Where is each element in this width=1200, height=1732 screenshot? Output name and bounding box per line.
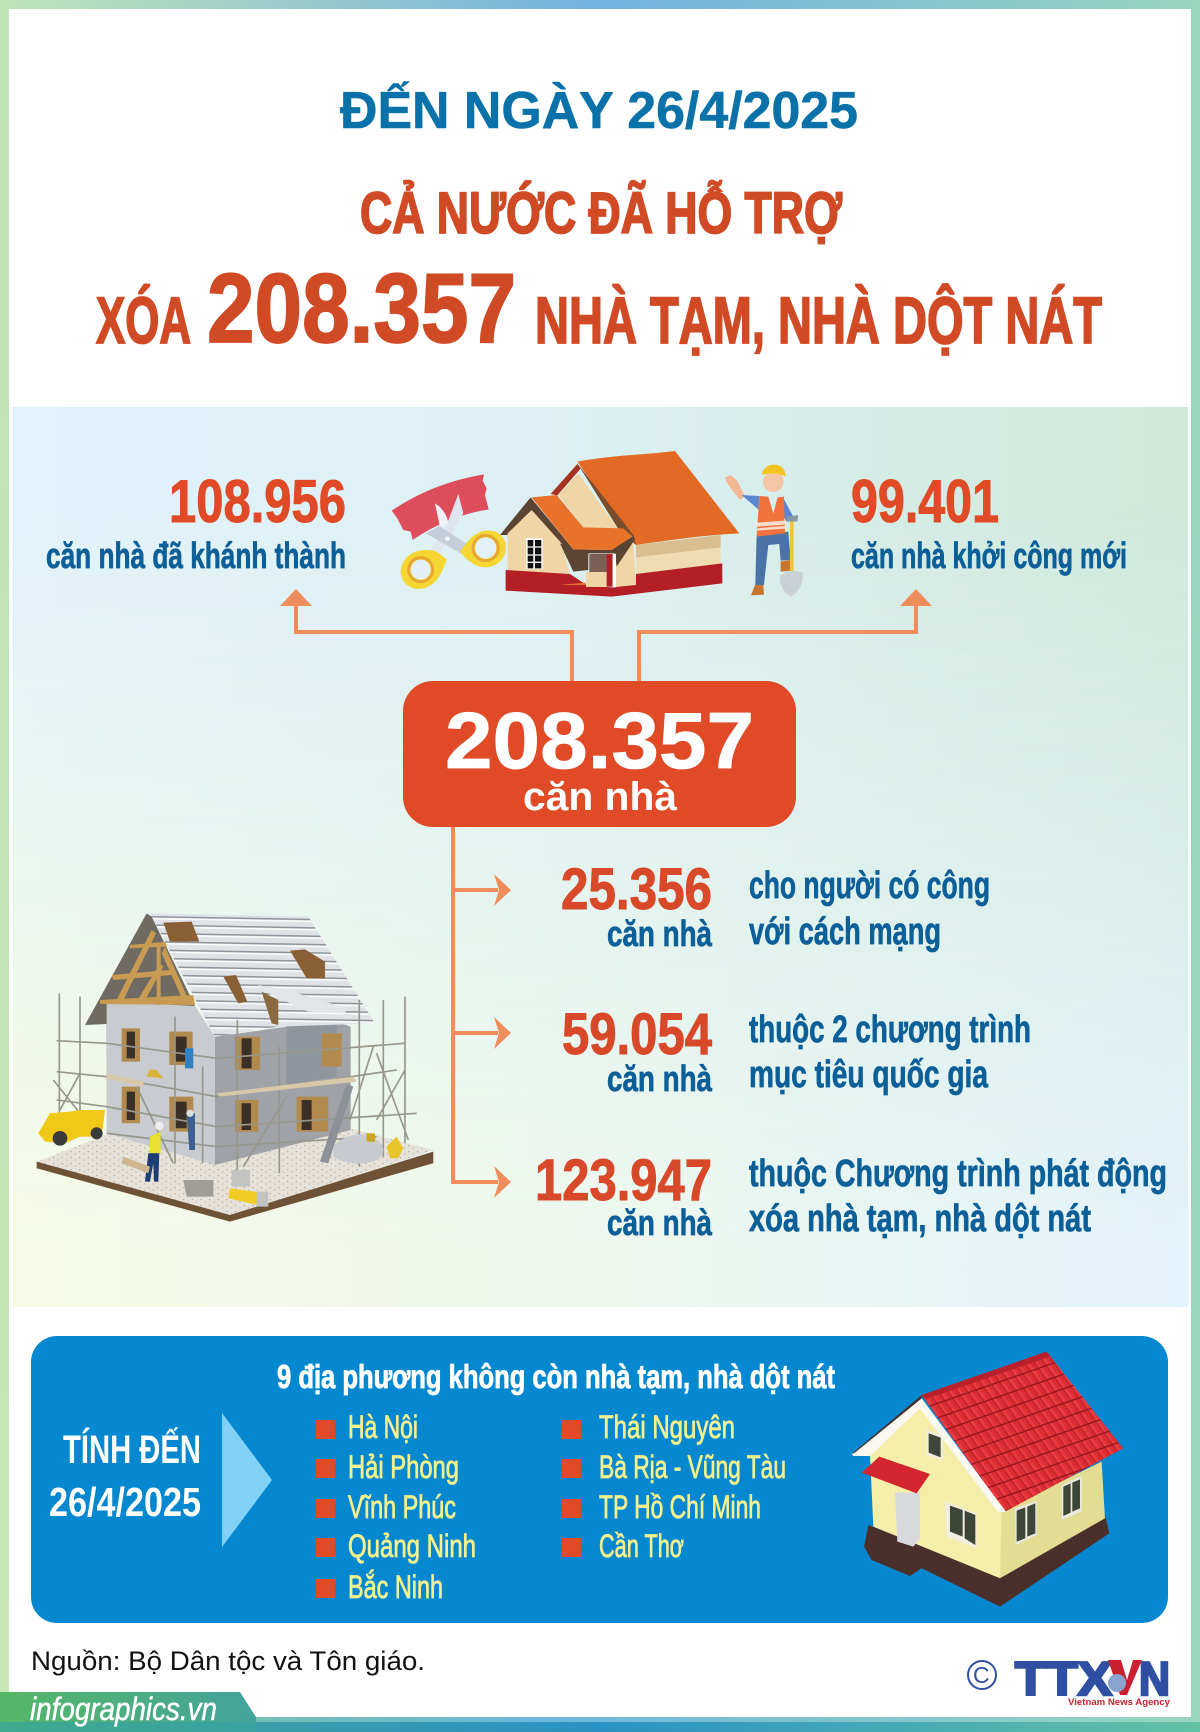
icon: construction worker with shovel xyxy=(725,465,803,597)
row: revolutionary contributors: căn nhà xyxy=(607,913,713,954)
row: national target programmes: mục tiêu quốc gia xyxy=(749,1054,989,1096)
list: localities column 1: Quảng Ninh xyxy=(348,1528,476,1564)
list: localities column 1: Hải Phòng xyxy=(348,1449,459,1485)
logo: TTXVN: N xyxy=(1139,1652,1170,1705)
logo: TTXVN: Vietnam News Agency xyxy=(1068,1697,1171,1708)
row: national target programmes xyxy=(562,1002,1031,1099)
panel label: as of date: TÍNH ĐẾN xyxy=(63,1426,201,1472)
panel label: as of date xyxy=(49,1426,201,1525)
panel label: as of date: 26/4/2025 xyxy=(49,1479,201,1525)
row: revolutionary contributors: với cách mạng xyxy=(749,911,941,953)
list: localities column 1 xyxy=(316,1409,476,1605)
row: national target programmes: căn nhà xyxy=(607,1058,713,1099)
title: XÓA xyxy=(96,283,191,357)
total box: 208.357 xyxy=(445,696,754,785)
stat: completed houses xyxy=(46,468,346,576)
footer bar xyxy=(0,1692,1200,1732)
row: national target programmes: thuộc 2 chương trình xyxy=(749,1009,1031,1051)
stat: completed houses: căn nhà đã khánh thành xyxy=(46,535,346,576)
list: localities column 2: Cần Thơ xyxy=(599,1528,684,1564)
row: revolutionary contributors xyxy=(561,857,990,954)
list: localities column 1: Vĩnh Phúc xyxy=(348,1489,456,1525)
list: localities column 2: Bà Rịa - Vũng Tàu xyxy=(599,1449,786,1485)
logo: TTXVN: TTX xyxy=(1015,1652,1112,1705)
panel: localities xyxy=(31,1336,1168,1623)
list: localities column 2: Thái Nguyên xyxy=(599,1409,735,1445)
title: 208.357 xyxy=(207,253,516,363)
stat: newly started houses: 99.401 xyxy=(851,468,999,535)
row: elimination programme: 123.947 xyxy=(535,1148,712,1213)
list: localities column 2 xyxy=(562,1409,786,1564)
tree connector arrows xyxy=(453,827,511,1198)
total box: căn nhà xyxy=(523,775,678,819)
illustration: red roof house xyxy=(852,1352,1123,1607)
row: elimination programme: xóa nhà tạm, nhà dột nát xyxy=(749,1198,1091,1240)
total box xyxy=(403,681,796,827)
heading: 9 localities: 9 địa phương không còn nhà tạm, nhà dột nát xyxy=(277,1358,835,1395)
row: revolutionary contributors: cho người có công xyxy=(749,865,990,907)
stat: completed houses: 108.956 xyxy=(169,468,346,535)
panel: breakdown background xyxy=(12,407,1188,1307)
list: localities column 1: Hà Nội xyxy=(348,1409,418,1445)
row: elimination programme: căn nhà xyxy=(607,1202,713,1243)
icon: scissors and ribbon xyxy=(392,474,506,589)
logo: TTXVN xyxy=(968,1652,1171,1708)
row: national target programmes: 59.054 xyxy=(562,1002,712,1067)
footer website label: infographics.vn xyxy=(30,1691,217,1727)
stat: newly started houses xyxy=(851,468,1127,576)
logo: TTXVN: C xyxy=(973,1662,990,1688)
title xyxy=(96,81,1102,363)
arrow: to localities xyxy=(222,1413,272,1547)
row: elimination programme xyxy=(535,1148,1167,1243)
illustration: house under construction xyxy=(37,913,433,1222)
icon: house with orange roof xyxy=(500,451,739,597)
source note: Nguồn: Bộ Dân tộc và Tôn giáo. xyxy=(31,1646,425,1676)
connector arrows to top stats xyxy=(280,589,932,681)
list: localities column 2: TP Hồ Chí Minh xyxy=(599,1489,761,1525)
title: CẢ NƯỚC ĐÃ HỖ TRỢ xyxy=(360,181,842,246)
list: localities column 1: Bắc Ninh xyxy=(348,1569,443,1605)
title: ĐẾN NGÀY 26/4/2025 xyxy=(340,81,858,140)
row: revolutionary contributors: 25.356 xyxy=(561,857,712,922)
